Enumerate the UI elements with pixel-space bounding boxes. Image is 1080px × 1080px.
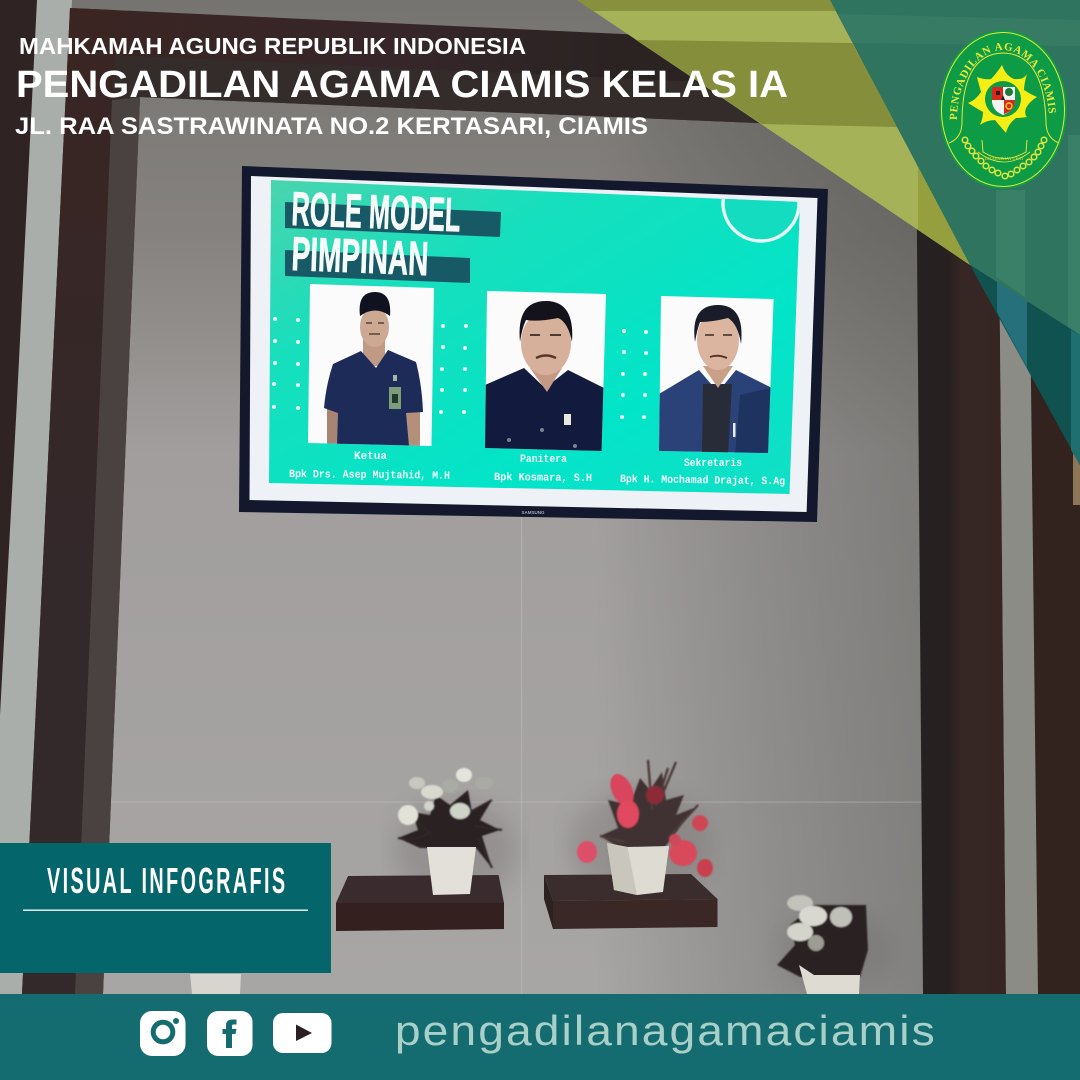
footer handle: pengadilanagamaciamis bbox=[395, 1008, 937, 1055]
caption: sekretaris: Bpk H. Mochamad Drajat, S.Ag bbox=[620, 474, 785, 488]
emblem shield bbox=[992, 87, 1015, 115]
hidden plant pot under panel bbox=[190, 974, 241, 994]
caption: panitera: Bpk Kosmara, S.H bbox=[494, 472, 592, 485]
logo: pengadilan agama ciamis emblem bbox=[939, 30, 1067, 189]
corner shape: olive triangle bbox=[577, 0, 970, 265]
shelf left bbox=[336, 875, 504, 931]
portrait: ketua bbox=[308, 284, 434, 446]
photo: wooden frame around wall bbox=[22, 8, 922, 994]
icon: youtube bbox=[273, 1013, 332, 1053]
emblem name: PENGADILAN AGAMA CIAMIS bbox=[950, 43, 1056, 120]
panel heading: VISUAL INFOGRAFIS bbox=[47, 862, 288, 902]
title bar: role model bbox=[285, 183, 501, 242]
photo: left pale strip and dark edge bbox=[0, 0, 72, 994]
icon: facebook bbox=[207, 1011, 252, 1056]
emblem motto: DHARMMAYUKTI bbox=[985, 156, 1024, 161]
header: court name: PENGADILAN AGAMA CIAMIS KELAS IA bbox=[16, 64, 788, 106]
decorative dot grids bbox=[272, 317, 648, 419]
plant: white flowers on left shelf bbox=[398, 768, 502, 895]
emblem wreath bbox=[962, 137, 1047, 179]
header: institution: MAHKAMAH AGUNG REPUBLIK INDONESIA bbox=[19, 33, 526, 59]
emblem sun bbox=[968, 65, 1037, 133]
portrait: panitera bbox=[483, 291, 606, 452]
icon: instagram bbox=[140, 1011, 186, 1056]
caption: ketua: Bpk Drs. Asep Mujtahid, M.H bbox=[289, 469, 450, 483]
caption: ketua bbox=[289, 451, 450, 483]
shelf right bbox=[544, 874, 718, 929]
title bar: pimpinan bbox=[285, 228, 470, 286]
tv white screen bbox=[250, 176, 818, 512]
tv brand label: SAMSUNG bbox=[521, 510, 545, 515]
tv bezel bbox=[239, 166, 828, 522]
slide: role model pimpinan bbox=[269, 165, 800, 494]
title bar: pimpinan: PIMPINAN bbox=[291, 228, 430, 286]
header: address: JL. RAA SASTRAWINATA NO.2 KERTASARI, CIAMIS bbox=[15, 113, 648, 140]
corner shape: green triangle bbox=[830, 0, 1080, 335]
plant: pink flowers on right shelf bbox=[577, 760, 713, 895]
television bbox=[239, 165, 828, 522]
title bar: role model: ROLE MODEL bbox=[291, 183, 461, 242]
corner shape: teal triangle bbox=[970, 265, 1080, 465]
footer bar bbox=[0, 994, 1080, 1080]
caption: ketua: Ketua bbox=[354, 451, 387, 463]
pot bbox=[607, 843, 669, 895]
caption: panitera bbox=[494, 454, 592, 485]
slide corner circle bbox=[721, 198, 800, 243]
pot bbox=[427, 847, 476, 895]
caption: sekretaris bbox=[620, 458, 785, 488]
caption: panitera: Panitera bbox=[520, 454, 567, 466]
plant: white flowers on floor right bbox=[777, 895, 868, 994]
photo: right columns bbox=[916, 120, 1080, 994]
portrait: sekretaris bbox=[657, 296, 774, 455]
panel: visual infografis bbox=[0, 843, 331, 973]
pot bbox=[799, 965, 860, 994]
caption: sekretaris: Sekretaris bbox=[684, 458, 742, 470]
